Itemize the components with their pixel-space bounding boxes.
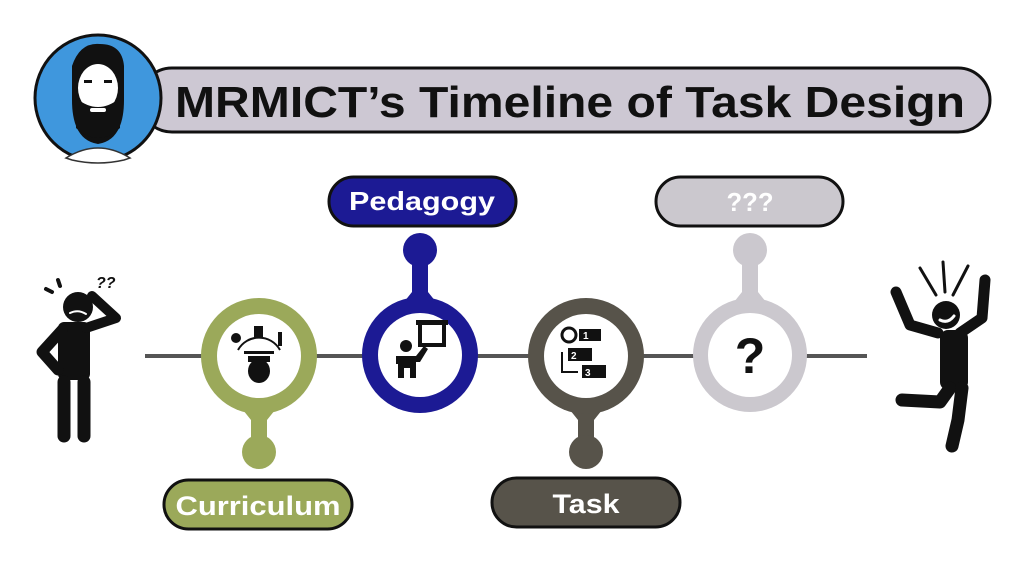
node: task [528,298,644,469]
title bar [140,68,990,132]
label: pedagogy [329,177,516,226]
icon: confused stick figure: ?? [96,275,116,292]
icon: happy stick figure [896,262,985,446]
icon: task steps [562,328,606,379]
timeline line [145,354,867,358]
label: ??? [656,177,843,226]
icon: task steps: 1 [583,331,589,342]
icon: teacher at board [396,320,448,378]
label: task: Task [552,489,621,519]
node: curriculum [201,298,317,469]
node: unknown [693,233,807,412]
label: ???: ??? [726,187,774,217]
icon: task steps: 3 [585,368,591,379]
label: curriculum: Curriculum [176,491,340,521]
node: pedagogy [362,233,478,413]
title bar: MRMICT’s Timeline of Task Design [175,78,965,127]
icon: task steps: 2 [571,351,577,362]
avatar [35,35,161,163]
label: pedagogy: Pedagogy [349,186,496,216]
icon: question mark: ? [735,328,765,384]
label: task [492,478,680,527]
icon: confused stick figure [42,275,116,436]
label: curriculum [164,480,352,529]
icon: curriculum [231,326,282,383]
